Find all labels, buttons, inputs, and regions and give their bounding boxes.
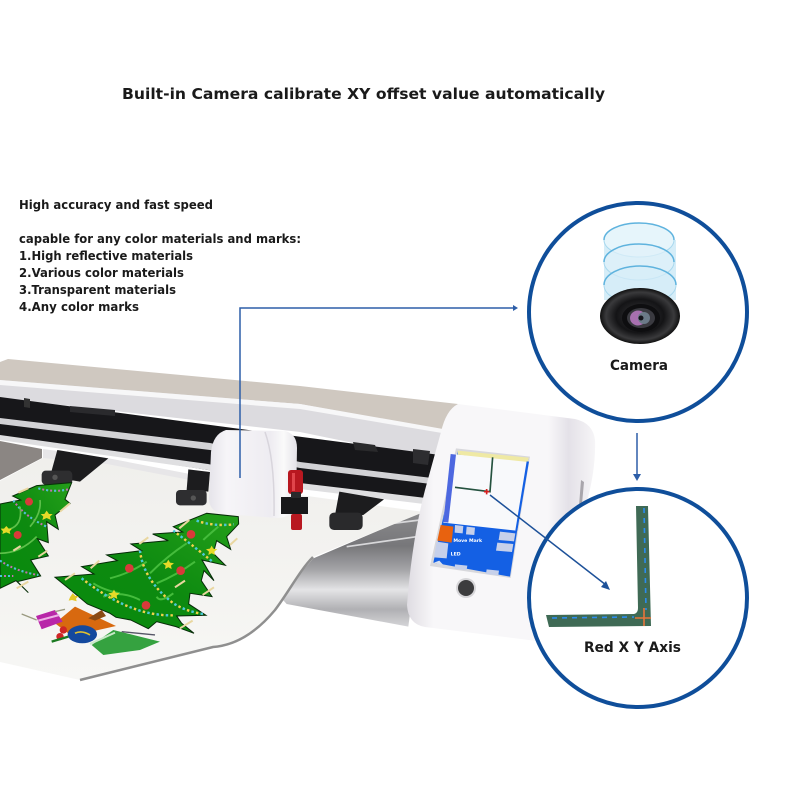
- axis label: Red X Y Axis: [584, 640, 681, 656]
- panel: red x y axis circle: [529, 489, 747, 707]
- pinch roller middle: [176, 469, 210, 505]
- panel: camera circle: [529, 203, 747, 421]
- christmas tree centre: [55, 513, 239, 633]
- camera label: Camera: [610, 358, 668, 374]
- pinch roller right: [329, 492, 384, 530]
- touch screen: Move Mark: [453, 538, 483, 544]
- black rail: [0, 397, 440, 500]
- feature text block: 4.Any color marks: [19, 299, 139, 314]
- pinch roller left: [42, 450, 108, 485]
- feature text block: 2.Various color materials: [19, 265, 184, 280]
- pointer arrow from screen to axis: [490, 495, 610, 590]
- white strip under rail: [43, 449, 190, 480]
- gifts graphic: [22, 607, 160, 655]
- print head carriage: [209, 430, 297, 518]
- arrow down to axis circle: [633, 433, 641, 481]
- beige top panel: [0, 359, 458, 431]
- connector arrow to camera: [240, 305, 518, 478]
- cutter machine: [0, 359, 595, 680]
- feature text block: 3.Transparent materials: [19, 282, 176, 297]
- title: Built-in Camera calibrate XY offset value automatically: [122, 85, 605, 103]
- feature text block: [19, 197, 301, 314]
- xy axis marker: [546, 506, 651, 627]
- silver roller: [280, 512, 423, 627]
- control housing: [407, 404, 595, 641]
- feature text block: capable for any color materials and marks:: [19, 231, 301, 246]
- power button: [456, 578, 476, 598]
- feature text block: High accuracy and fast speed: [19, 197, 213, 212]
- christmas tree left: [0, 483, 72, 593]
- icon: camera lens with light rings: [600, 223, 680, 344]
- white front band: [0, 380, 444, 460]
- vinyl paper: [0, 458, 424, 680]
- left base shadow: [0, 441, 42, 480]
- feature text block: 1.High reflective materials: [19, 248, 193, 263]
- touch screen: [430, 448, 530, 578]
- touch screen: LED: [451, 551, 461, 557]
- red tool holder: [281, 470, 308, 530]
